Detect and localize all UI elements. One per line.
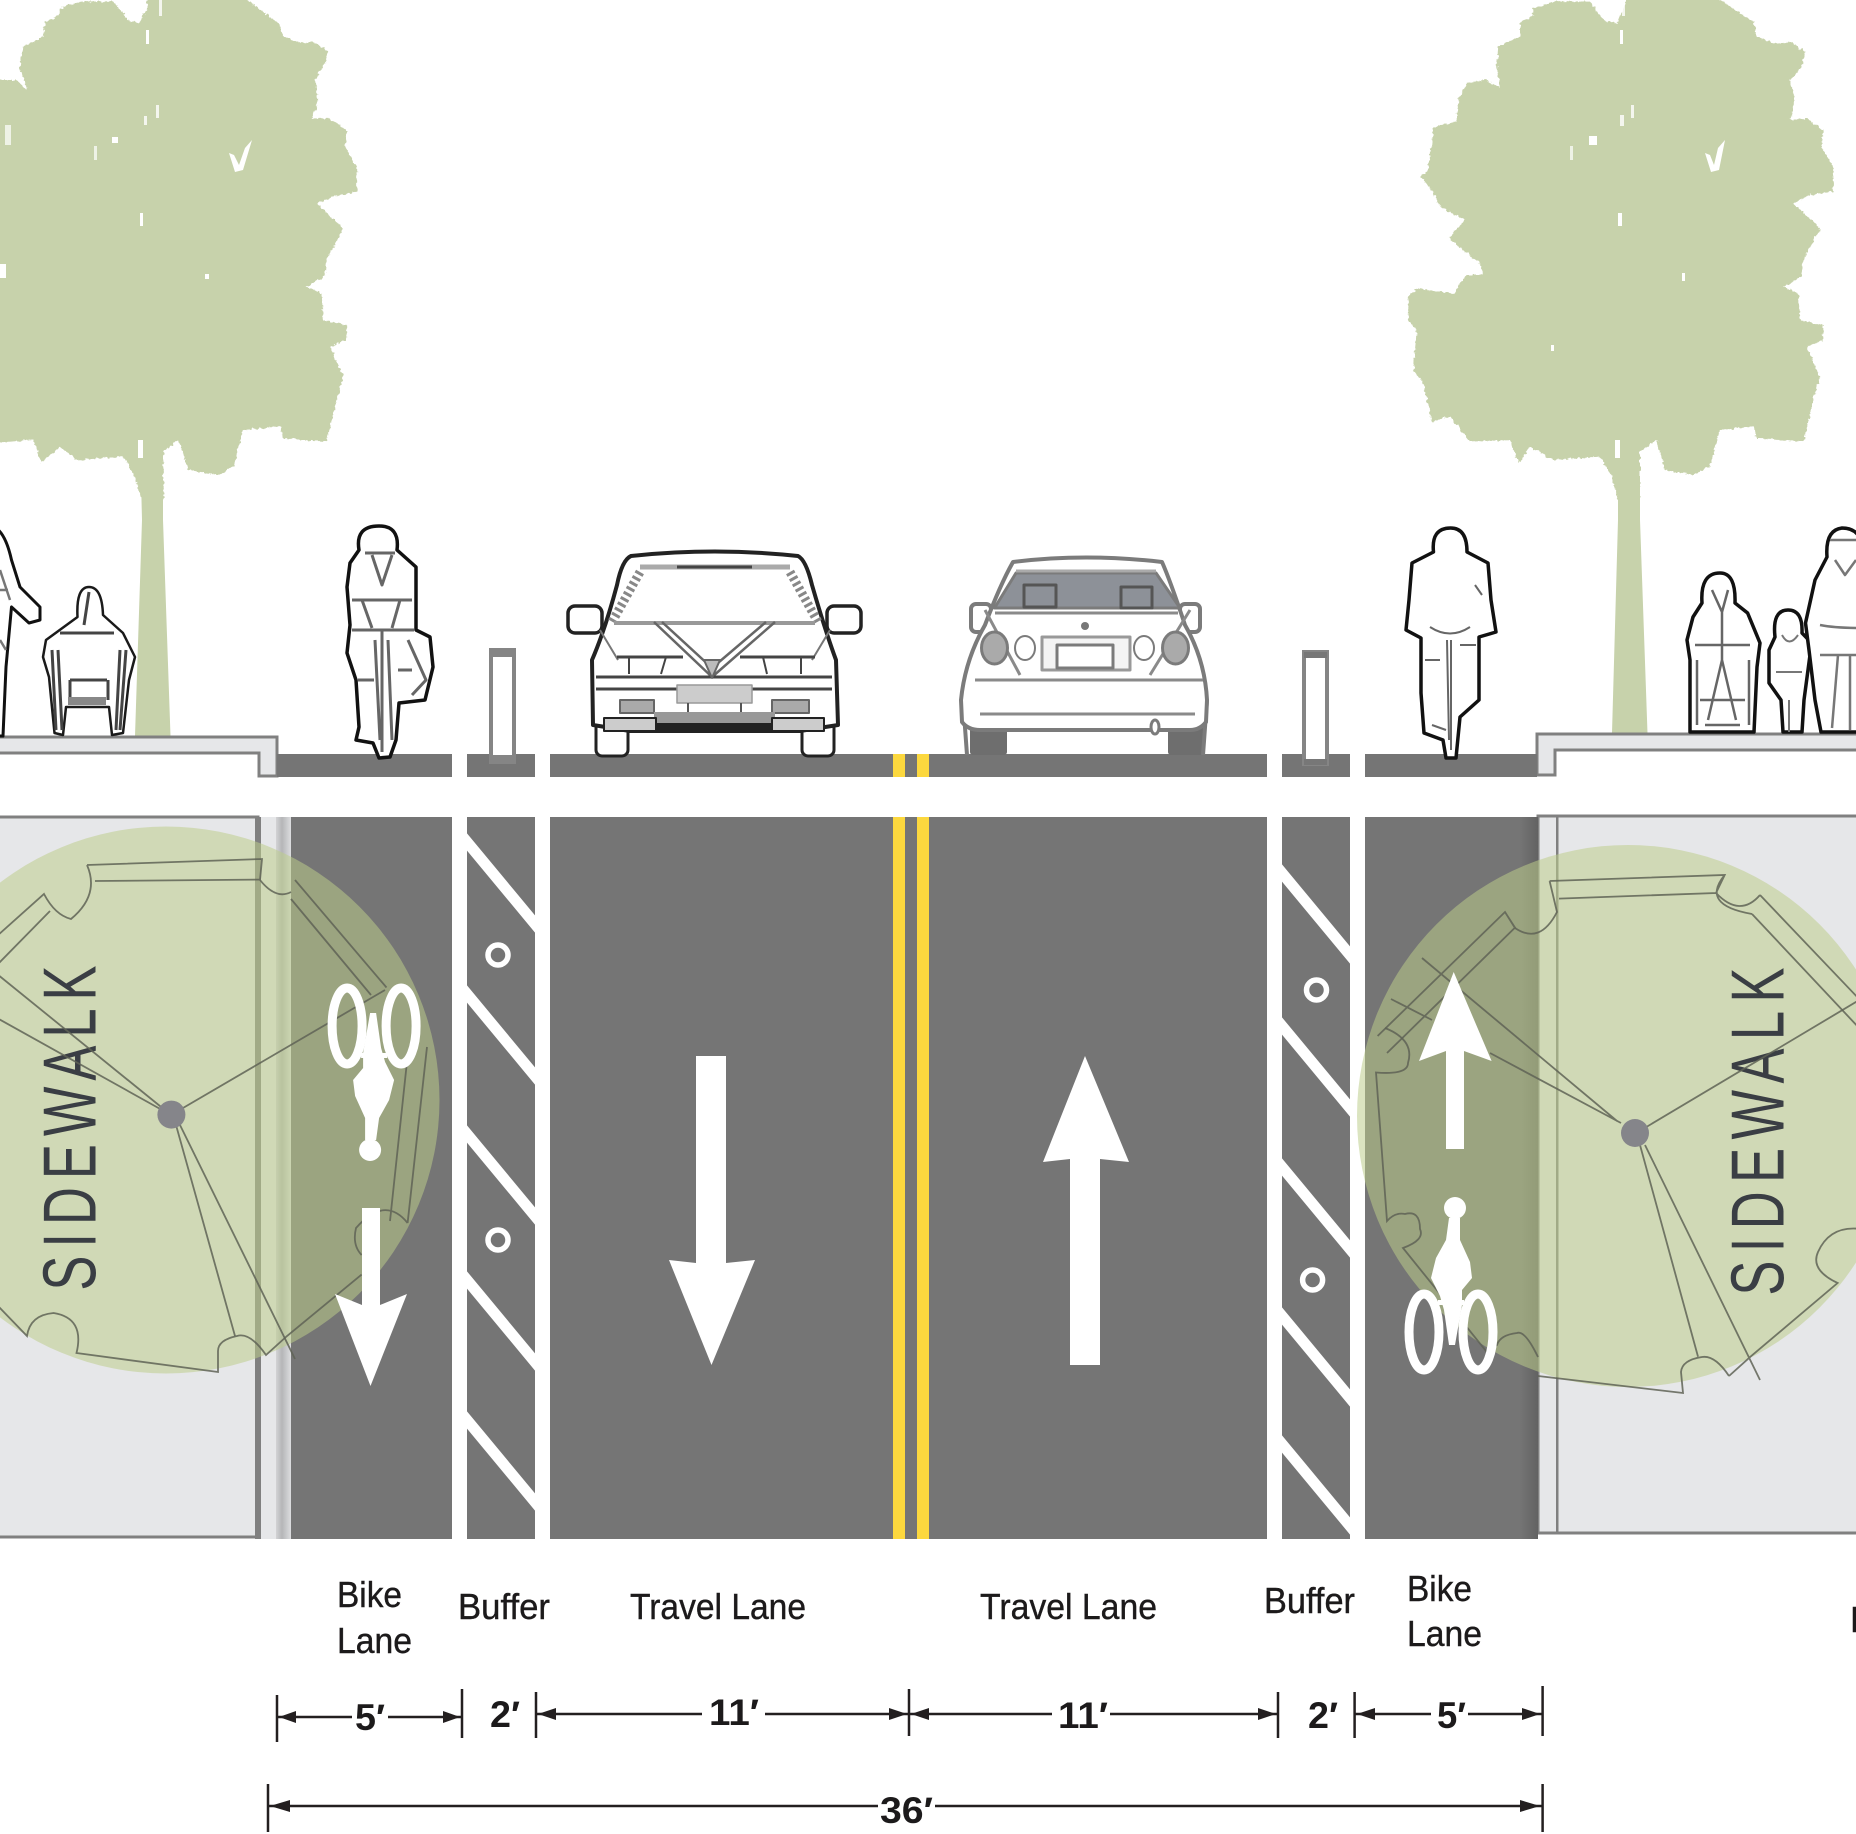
section: roadway strip with lanes and centre line (277, 754, 1537, 777)
bicycle symbol: left bike lane, inverted (332, 988, 416, 1161)
tree grate circle: left (0, 826, 440, 1374)
dimension: left bike lane 5 ft: 5′ (355, 1697, 385, 1738)
buffer hatching: right (1282, 864, 1350, 1534)
dimension: left buffer 2 ft (490, 1692, 536, 1738)
label: left bike lane: Bike (337, 1574, 402, 1615)
label: right travel lane: Travel Lane (980, 1586, 1157, 1627)
label: left bike lane: Lane (337, 1620, 412, 1661)
plan: roadway with lanes (291, 817, 1538, 1539)
label: right bike lane: Bike (1407, 1568, 1472, 1609)
person: wheelchair user left (43, 587, 135, 735)
person: cyclist right, rear view (1406, 528, 1496, 758)
label: right buffer: Buffer (1264, 1580, 1355, 1621)
arrow: left travel lane, downward (669, 1056, 755, 1365)
section: right sidewalk and curb (1537, 734, 1856, 775)
arrow: right bike lane, upward (1419, 972, 1492, 1149)
dimension: right bike lane 5 ft (1355, 1686, 1543, 1738)
label: right bike lane: Lane (1407, 1613, 1482, 1654)
tree: right canopy and trunk (1408, 0, 1833, 733)
tree grate hub: right (1621, 1119, 1649, 1147)
car: rear view, right travel lane (961, 558, 1207, 755)
dimension: right bike lane 5 ft: 5′ (1437, 1695, 1466, 1736)
bollard: left (491, 650, 514, 762)
dimension: left travel lane 11 ft: 11′ (709, 1692, 759, 1733)
dimension: right travel lane 11 ft (909, 1692, 1278, 1738)
bicycle symbol: right bike lane (1409, 1197, 1493, 1370)
person: wheelchair user right (1687, 573, 1760, 732)
dimension: right travel lane 11 ft: 11′ (1058, 1695, 1108, 1736)
label: left SIDEWALK: SIDEWALK (27, 957, 112, 1291)
tree grate hub: left (157, 1101, 185, 1129)
dimension: left travel lane 11 ft (536, 1689, 909, 1736)
arrow: right travel lane, upward (1043, 1056, 1129, 1365)
label: right SIDEWALK: SIDEWALK (1715, 959, 1800, 1296)
label: left buffer: Buffer (458, 1586, 550, 1627)
tree grate circle: right (1357, 845, 1856, 1387)
lane labels (337, 1568, 1856, 1661)
tree: left canopy and trunk (0, 0, 357, 736)
dimension: total width 36 ft: 36′ (880, 1790, 933, 1831)
double yellow centre line (893, 817, 929, 1539)
buffer circles (488, 945, 1326, 1290)
dimension: total width 36 ft (268, 1784, 1543, 1832)
bollard: right (1304, 652, 1327, 765)
car: front view, left travel lane (568, 552, 861, 756)
dimension: left bike lane 5 ft (277, 1689, 462, 1742)
dimension: left buffer 2 ft: 2′ (490, 1694, 520, 1735)
dimension: right buffer 2 ft: 2′ (1308, 1695, 1338, 1736)
person: cyclist left, front view (347, 526, 433, 758)
tree grate linework: right (1376, 875, 1856, 1393)
person: pedestrian partial at left edge (0, 528, 40, 736)
person: child right (1769, 610, 1812, 732)
person: adult right (1806, 528, 1856, 732)
arrow: left bike lane, downward (335, 1208, 407, 1386)
section: left sidewalk and curb (0, 737, 277, 776)
plan: right sidewalk (1538, 816, 1856, 1533)
dimension lines (268, 1686, 1543, 1832)
plan: left sidewalk (0, 817, 291, 1539)
label: left travel lane: Travel Lane (630, 1586, 806, 1627)
tree grate linework: left (0, 859, 427, 1372)
buffer hatching: left (467, 834, 535, 1510)
